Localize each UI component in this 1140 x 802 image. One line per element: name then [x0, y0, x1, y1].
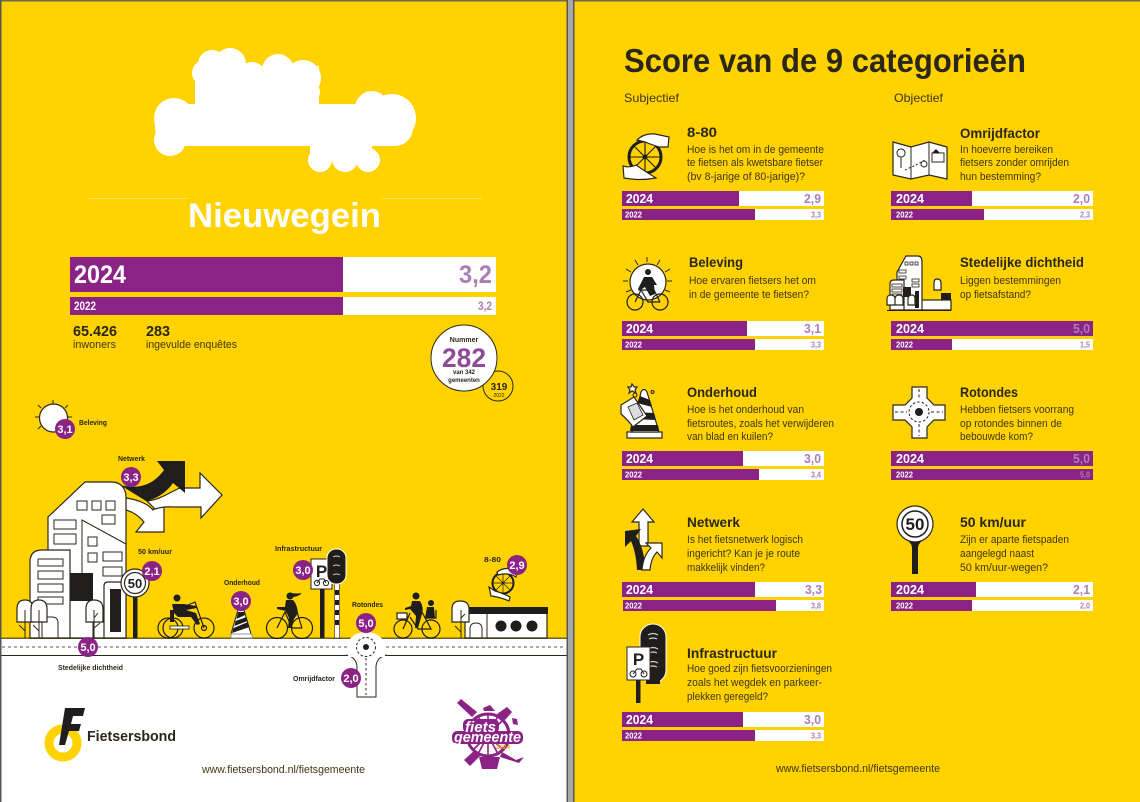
- scene: right building: [452, 601, 548, 638]
- Fietsersbond logo: [49, 708, 176, 757]
- total score bars: 2024: [74, 261, 126, 289]
- text: Beleving: [689, 254, 743, 270]
- scene: parent and child cyclist: [394, 592, 440, 638]
- rank badge 2024: [431, 325, 497, 391]
- icon: traffic light and parking sign: P: [633, 650, 644, 669]
- scene labels: 8-80: [484, 557, 501, 564]
- bars: 5,0: [1080, 470, 1090, 480]
- bars: 2024: [626, 451, 654, 466]
- bars: 2022: [896, 340, 913, 350]
- text: aangelegd naast: [960, 548, 1034, 560]
- bars: 5,0: [1073, 451, 1090, 466]
- category: Beleving: [622, 254, 824, 350]
- scene: 50 sign: [121, 569, 149, 638]
- bars: 2024: [896, 451, 925, 466]
- road and white foot area: [2, 638, 566, 802]
- category: Netwerk: [622, 509, 824, 611]
- text: Infrastructuur: [687, 645, 778, 661]
- text: Is het fietsnetwerk logisch: [687, 534, 803, 546]
- text: Rotondes: [960, 384, 1018, 400]
- scene labels: Netwerk: [118, 456, 145, 463]
- bars: 3,0: [804, 451, 821, 466]
- bars: 2024: [896, 582, 925, 597]
- bars: [891, 191, 1093, 220]
- panel: right page: [573, 0, 1140, 802]
- text: Hoe goed zijn fietsvoorzieningen: [687, 663, 832, 675]
- fietsgemeente logo: [452, 699, 524, 769]
- bars: 3,3: [811, 340, 821, 350]
- bars: 1,5: [1080, 340, 1090, 350]
- bars: 2,3: [1080, 210, 1090, 220]
- footer url left: www.fietsersbond.nl/fietsgemeente: [201, 764, 365, 776]
- scene: roundabout and side road: [346, 632, 387, 697]
- bars: 3,3: [811, 730, 821, 740]
- text: plekken geregeld?: [687, 691, 768, 703]
- bars: 2022: [896, 470, 913, 480]
- text: makkelijk vinden?: [687, 562, 765, 574]
- text: [689, 254, 816, 301]
- fietsgemeente logo: 2024: [496, 745, 511, 751]
- bars: 2022: [896, 600, 913, 610]
- scene score badges: [55, 419, 527, 688]
- category: Stedelijke dichtheid: [887, 254, 1093, 350]
- bars: [622, 191, 824, 220]
- white cloud covering logo: [154, 48, 416, 172]
- bars: [891, 582, 1093, 611]
- scene score badges: 3,3: [123, 472, 139, 484]
- text: Netwerk: [687, 514, 740, 530]
- text: fietsroutes, zoals het verwijderen: [687, 418, 834, 430]
- bars: 2,0: [1080, 600, 1090, 610]
- bars: 2,9: [804, 191, 821, 206]
- bars: 2024: [626, 712, 654, 727]
- text: Omrijdfactor: [960, 125, 1041, 141]
- icon: traffic light and parking sign: [627, 624, 666, 703]
- text: Zijn er aparte fietspaden: [960, 534, 1069, 546]
- total score bars: [70, 257, 496, 315]
- scene score badges: 5,0: [358, 618, 374, 630]
- text: 50 km/uur-wegen?: [960, 562, 1048, 574]
- text: [687, 124, 824, 183]
- bars: 2022: [625, 730, 642, 740]
- scene: main building: [48, 482, 126, 638]
- text: Liggen bestemmingen: [960, 275, 1061, 287]
- scene labels: [58, 420, 501, 683]
- bars: 2022: [625, 470, 642, 480]
- stat: inwoners: inwoners: [73, 339, 116, 351]
- rank badge 2022: 2022: [493, 393, 505, 399]
- bars: 2024: [896, 321, 925, 336]
- scene labels: Omrijdfactor: [293, 676, 335, 683]
- panel: left page: [0, 0, 568, 802]
- scene: recumbent cyclist: [158, 594, 214, 638]
- category: Omrijdfactor: [891, 125, 1093, 220]
- arrow white right: [147, 473, 222, 518]
- column heading subjectief: Subjectief: [624, 91, 680, 105]
- bars: 5,0: [1073, 321, 1090, 336]
- bars: 2022: [625, 210, 642, 220]
- bars: 2024: [626, 321, 654, 336]
- text: (bv 8-jarige of 80-jarige)?: [687, 171, 805, 183]
- column heading objectief: Objectief: [894, 91, 944, 105]
- bars: [622, 321, 824, 350]
- text: bebouwde kom?: [960, 431, 1033, 443]
- total score bars: 3,2: [459, 261, 492, 289]
- text: [687, 645, 832, 703]
- rank badge 2024: Nummer: [450, 337, 478, 344]
- text: Hoe is het onderhoud van: [687, 404, 804, 416]
- bars: 2,1: [1073, 582, 1090, 597]
- stat: enquetes: [146, 323, 237, 351]
- icon: cone with glove: [621, 384, 662, 438]
- bars: 2022: [625, 600, 642, 610]
- text: [960, 254, 1084, 301]
- bars: 3,1: [804, 321, 821, 336]
- scene: woman cyclist: [266, 592, 312, 638]
- fietsgemeente logo: fiets: [465, 719, 496, 736]
- stat: enquetes: 283: [146, 323, 170, 340]
- scene labels: Stedelijke dichtheid: [58, 665, 123, 672]
- bars: 3,8: [811, 600, 821, 610]
- text: [960, 125, 1069, 183]
- scene: traffic light: [327, 549, 346, 638]
- bars: [891, 451, 1093, 480]
- scene labels: Rotondes: [352, 602, 383, 609]
- scene labels: Infrastructuur: [275, 546, 322, 553]
- text: zoals het wegdek en parkeer-: [687, 677, 822, 689]
- scene score badges: 3,1: [57, 424, 73, 436]
- bars: 2024: [626, 191, 654, 206]
- bars: 2024: [896, 191, 925, 206]
- page title: Score van de 9 categorieën: [624, 42, 1026, 79]
- icon: wheel in hands: [623, 134, 669, 180]
- text: Hoe ervaren fietsers het om: [689, 275, 816, 287]
- scene score badges: 3,0: [295, 565, 311, 577]
- fietsgemeente logo: gemeente: [453, 729, 521, 746]
- text: [960, 384, 1074, 443]
- text: [687, 514, 803, 574]
- bars: [622, 712, 824, 741]
- bars: 2,0: [1073, 191, 1090, 206]
- scene labels: 50 km/uur: [138, 549, 172, 556]
- bars: [622, 582, 824, 611]
- bars: [622, 451, 824, 480]
- total score bars: 3,2: [478, 299, 492, 313]
- category: Onderhoud: [621, 384, 834, 480]
- icon: mini city: [887, 256, 951, 311]
- scene: traffic cone: [231, 610, 252, 638]
- icon: cyclist in sun: [623, 257, 672, 310]
- text: Hebben fietsers voorrang: [960, 404, 1074, 416]
- scene: wheel in hands: [489, 568, 517, 601]
- bars: 2024: [626, 582, 654, 597]
- icon: speed sign: [897, 506, 933, 574]
- bars: 3,0: [804, 712, 821, 727]
- rank badge 2024: gemeenten: [448, 378, 480, 384]
- text: Stedelijke dichtheid: [960, 254, 1084, 270]
- total score bars: 2022: [74, 299, 96, 313]
- text: te fietsen als kwetsbare fietser: [687, 157, 823, 169]
- icon: splitting arrows: [625, 509, 662, 570]
- text: hun bestemming?: [960, 171, 1041, 183]
- rank badge 2022: 319: [491, 382, 508, 393]
- category: Rotondes: [891, 384, 1093, 480]
- scene: parking sign: [311, 559, 332, 638]
- bars: 3,3: [811, 210, 821, 220]
- scene labels: Onderhoud: [224, 580, 260, 587]
- scene labels: Beleving: [79, 420, 107, 427]
- footer url right: www.fietsersbond.nl/fietsgemeente: [775, 763, 940, 775]
- text: [960, 514, 1069, 574]
- icon: speed sign: 50: [906, 515, 924, 534]
- Fietsersbond logo: Fietsersbond: [87, 728, 176, 745]
- rank badge 2022: [483, 371, 513, 401]
- text: [687, 384, 834, 443]
- text: fietsers zonder omrijden: [960, 157, 1069, 169]
- rank badge 2024: van 342: [453, 370, 476, 376]
- arrow black: [120, 461, 185, 501]
- bars: 3,3: [805, 582, 822, 597]
- scene: trees: [17, 600, 103, 638]
- scene score badges: 2,9: [509, 560, 525, 572]
- stat: enquetes: ingevulde enquêtes: [146, 339, 237, 351]
- scene score badges: 2,1: [144, 566, 160, 578]
- text: ingericht? Kan je je route: [687, 548, 800, 560]
- bars: 3,4: [811, 470, 821, 480]
- scene score badges: 3,0: [233, 596, 249, 608]
- text: in de gemeente te fietsen?: [689, 289, 809, 301]
- text: van blad en kuilen?: [687, 431, 773, 443]
- arrow white down: [126, 498, 164, 532]
- scene score badges: 5,0: [80, 642, 96, 654]
- icon: folded map: [893, 142, 947, 179]
- text: 50 km/uur: [960, 514, 1027, 530]
- text: op rotondes binnen de: [960, 418, 1062, 430]
- stat: inwoners: [73, 323, 117, 351]
- category: Infrastructuur: [622, 624, 832, 741]
- scene: sun: [35, 400, 72, 432]
- category: 8-80: [622, 124, 824, 220]
- bars: 2022: [625, 340, 642, 350]
- text: Onderhoud: [687, 384, 757, 400]
- rank badge 2024: 282: [442, 343, 486, 373]
- scene: 50 sign: 50: [128, 576, 142, 591]
- scene: parking sign: P: [316, 562, 327, 581]
- icon: roundabout: [893, 387, 945, 438]
- bars: 2022: [896, 210, 913, 220]
- category: 50 km/uur: [891, 506, 1093, 611]
- scene: left building: [30, 550, 70, 638]
- scene score badges: 2,0: [343, 673, 359, 685]
- text: op fietsafstand?: [960, 289, 1031, 301]
- city name: Nieuwegein: [188, 197, 381, 235]
- text: In hoeverre bereiken: [960, 144, 1053, 156]
- text: 8-80: [687, 124, 717, 140]
- text: Hoe is het om in de gemeente: [687, 144, 824, 156]
- bars: [891, 321, 1093, 350]
- stat: inwoners: 65.426: [73, 323, 117, 340]
